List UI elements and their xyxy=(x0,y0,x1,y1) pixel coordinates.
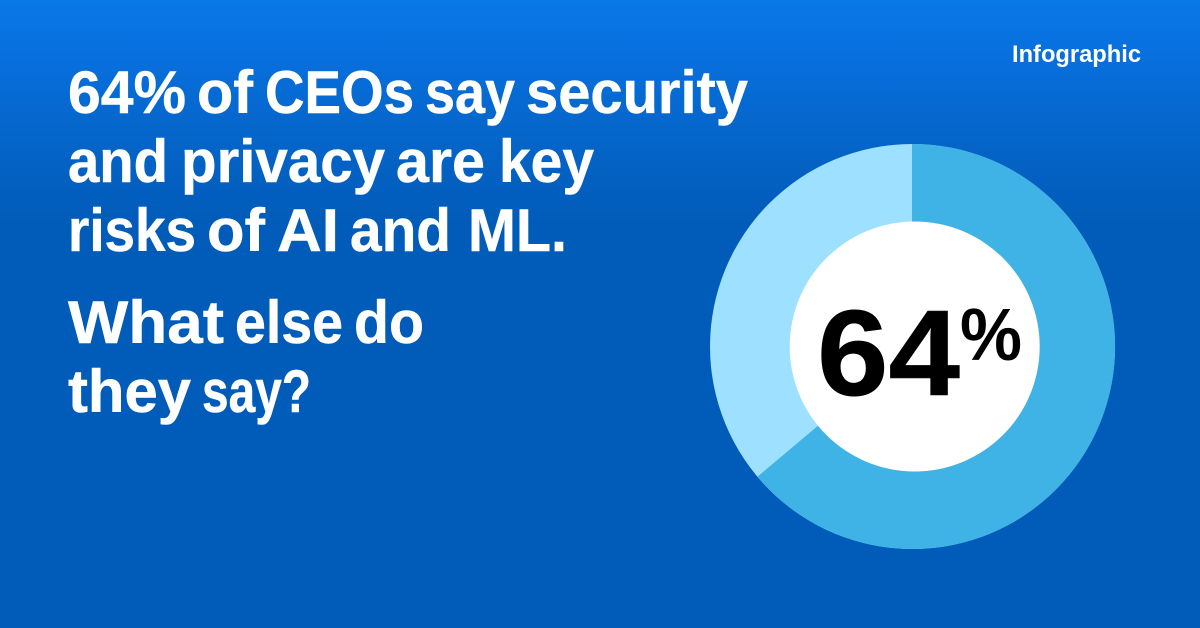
subheading: question xyxy=(68,289,424,425)
heading: key statistic: and xyxy=(68,128,168,195)
heading: key statistic: key xyxy=(499,128,595,195)
heading: key statistic xyxy=(68,59,749,264)
heading: key statistic: AI xyxy=(277,197,339,264)
heading: key statistic: privacy xyxy=(181,128,386,195)
subheading: question: say? xyxy=(202,358,311,425)
donut chart: 64% xyxy=(710,144,1115,549)
heading: key statistic: are xyxy=(396,128,485,195)
heading: key statistic: security xyxy=(526,59,749,126)
donut value: % xyxy=(960,293,1022,376)
heading: key statistic: ML. xyxy=(468,197,567,264)
heading: key statistic: 64% xyxy=(68,59,186,126)
donut value xyxy=(817,285,1022,421)
subheading: question: do xyxy=(354,289,424,356)
donut remainder segment xyxy=(710,144,1115,549)
subheading: question: What xyxy=(68,289,224,356)
donut 64% segment xyxy=(758,144,1115,549)
donut value: 64 xyxy=(817,285,960,421)
heading: key statistic: of xyxy=(207,197,266,264)
label: Infographic: Infographic xyxy=(1012,41,1141,68)
heading: key statistic: CEOs xyxy=(265,59,414,126)
heading: key statistic: risks xyxy=(68,197,196,264)
subheading: question: else xyxy=(235,289,343,356)
subheading: question: they xyxy=(68,358,192,425)
donut centre xyxy=(790,222,1040,472)
heading: key statistic: of xyxy=(197,59,254,126)
heading: key statistic: and xyxy=(350,197,451,264)
heading: key statistic: say xyxy=(425,59,516,126)
